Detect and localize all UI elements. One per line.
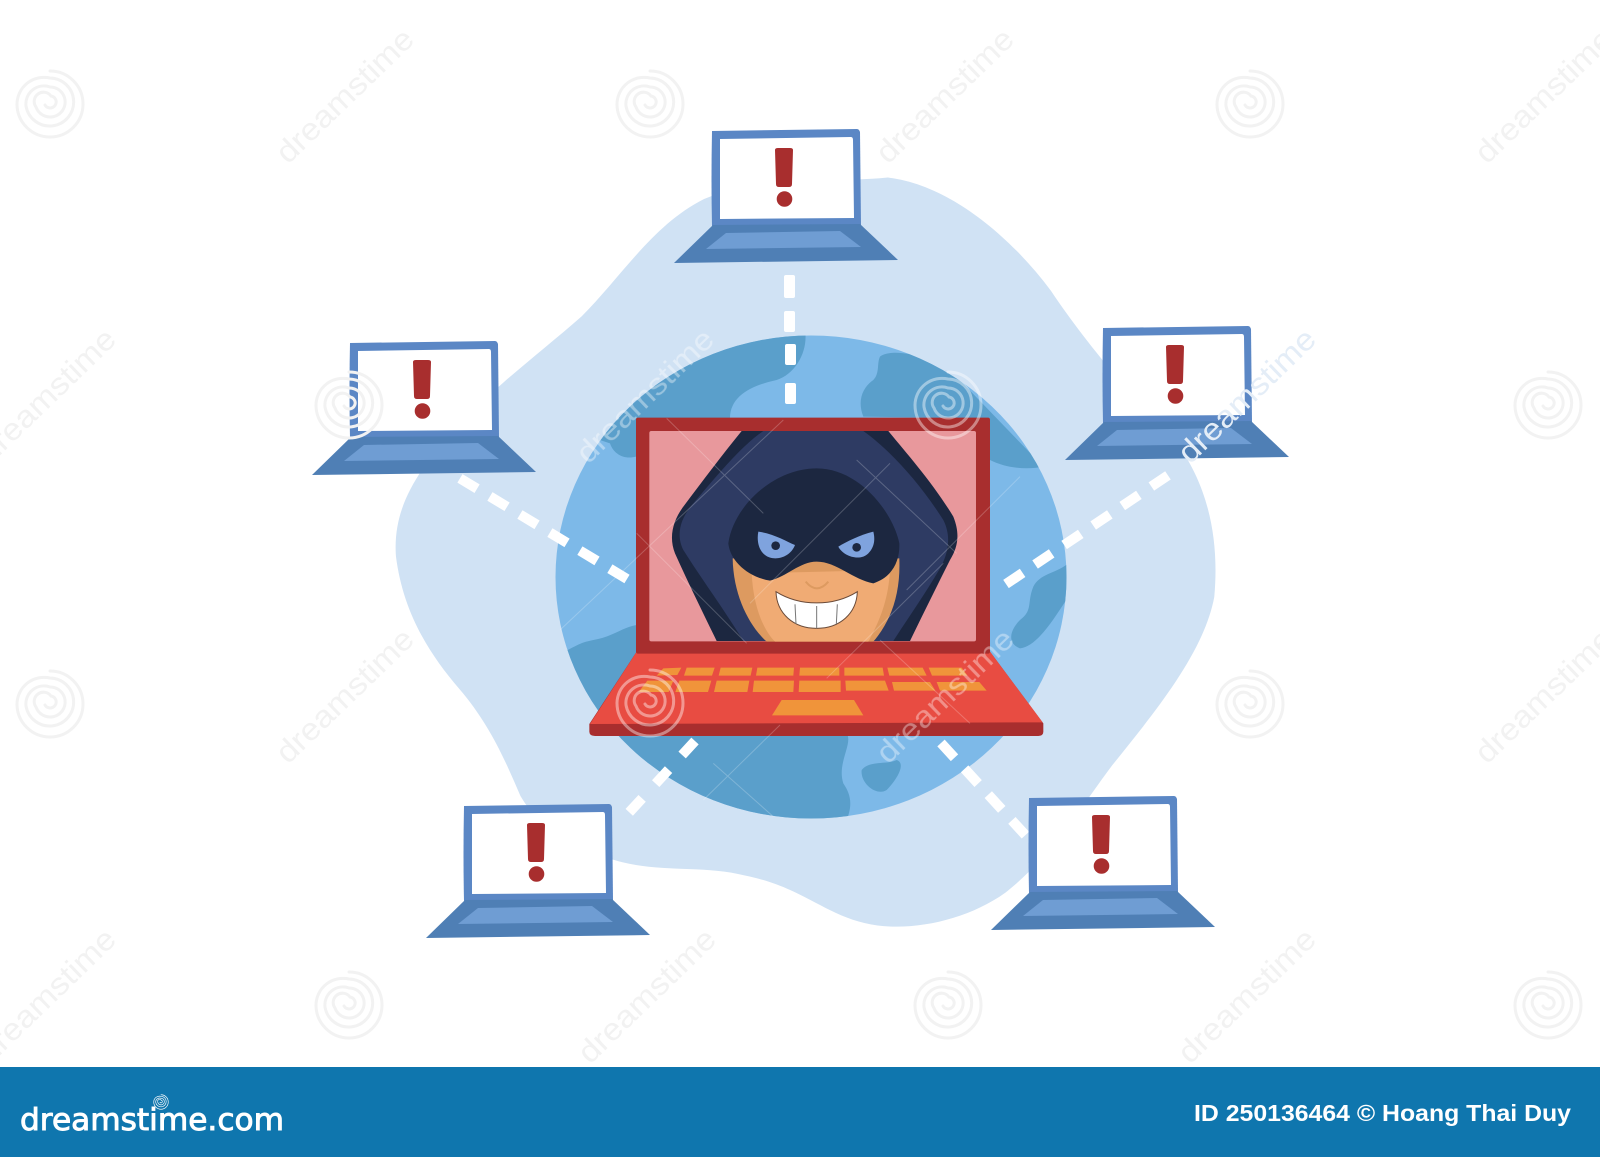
hacker — [672, 431, 957, 642]
watermark text on artwork: dreamstime — [869, 621, 1021, 770]
smile — [776, 592, 857, 628]
watermark text: dreamstime — [869, 21, 1021, 170]
connection: top dashes — [784, 275, 796, 404]
laptop: bottom left — [426, 804, 650, 938]
keys — [639, 668, 987, 715]
laptop: right — [1065, 326, 1289, 460]
keyboard base — [589, 652, 1043, 736]
background blob — [396, 178, 1216, 927]
watermark spirals on artwork — [617, 372, 981, 736]
laptop: left — [312, 341, 536, 475]
face — [733, 558, 899, 642]
connection: left dashes — [456, 476, 627, 579]
screen frame — [636, 418, 990, 654]
laptop: top — [674, 129, 898, 263]
watermark text: dreamstime — [269, 21, 421, 170]
connection: bottom-left dashes — [624, 741, 695, 818]
connection: bottom-right dashes — [941, 743, 1028, 838]
watermark text: dreamstime — [1171, 921, 1323, 1070]
hood — [672, 431, 957, 641]
globe — [556, 330, 1068, 820]
continents — [560, 330, 1068, 820]
watermark text on artwork — [569, 321, 1021, 770]
watermark text: dreamstime — [571, 921, 723, 1070]
watermark text: dreamstime — [269, 621, 421, 770]
footer credit: ID 250136464 © Hoang Thai Duy — [1194, 1100, 1571, 1126]
nose — [806, 582, 828, 588]
watermark diagonal lines — [560, 418, 1020, 817]
eyes — [758, 532, 795, 558]
watermark text on artwork: dreamstime — [569, 321, 721, 470]
laptop: bottom right — [991, 796, 1215, 930]
watermark text: dreamstime — [1171, 321, 1323, 470]
mask — [728, 468, 899, 583]
footer logo: dreamstime.com — [20, 1103, 284, 1138]
connection: right dashes — [1006, 470, 1176, 584]
central hacker laptop — [589, 418, 1043, 736]
screen — [649, 431, 976, 641]
footer bar — [0, 1067, 1600, 1157]
